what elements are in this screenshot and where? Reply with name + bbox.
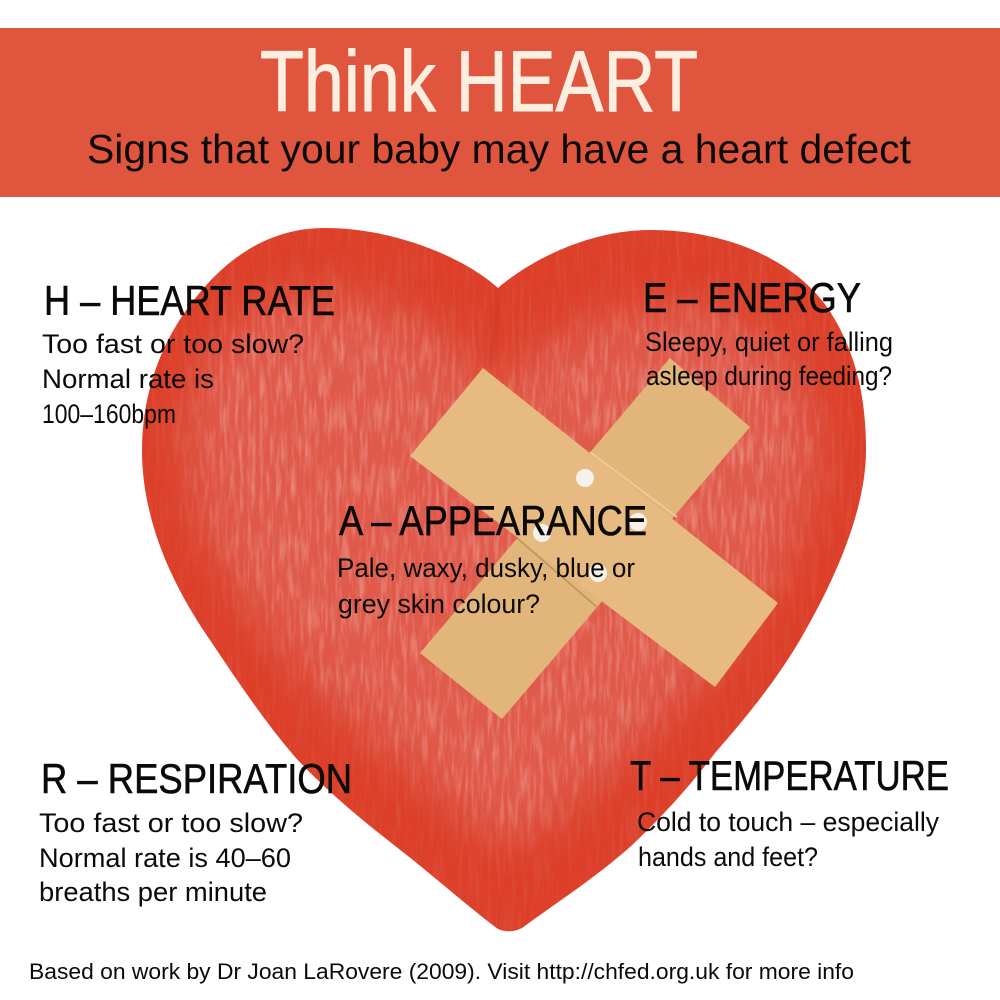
heading: H – HEART RATE: [44, 277, 335, 324]
header banner: [0, 28, 1000, 197]
section: R respiration: breaths per minute: [39, 877, 267, 907]
heart illustration: [130, 220, 880, 940]
section: H heart rate: 100–160bpm: [42, 399, 176, 429]
bandage strip: upper-left to lower-right: [410, 368, 778, 687]
subtitle: Signs that your baby may have a heart defect: [87, 126, 912, 172]
section: H heart rate: Normal rate is: [42, 364, 214, 394]
section: T temperature: [630, 752, 949, 872]
bandage holes: [576, 469, 594, 487]
bandage strip: lower-left to upper-right: [420, 358, 750, 719]
section: E energy: asleep during feeding?: [646, 361, 892, 391]
title: Think HEART: [260, 34, 698, 130]
heading: R – RESPIRATION: [41, 755, 352, 802]
section: A appearance: [337, 497, 647, 619]
description: Pale, waxy, dusky, blue or: [337, 553, 635, 583]
centre crease: [490, 296, 498, 361]
description: Cold to touch – especially: [637, 807, 939, 837]
description: Too fast or too slow?: [42, 329, 304, 359]
heading: E – ENERGY: [643, 274, 861, 321]
section: R respiration: Normal rate is 40–60: [39, 843, 291, 873]
section: R respiration: [39, 755, 352, 907]
description: Sleepy, quiet or falling: [645, 327, 893, 357]
section: H heart rate: [42, 277, 335, 429]
heading: A – APPEARANCE: [339, 497, 647, 544]
section: T temperature: hands and feet?: [638, 842, 818, 872]
section: E energy: [643, 274, 893, 391]
description: Too fast or too slow?: [39, 808, 303, 838]
section: A appearance: grey skin colour?: [338, 589, 540, 619]
footer credit: Based on work by Dr Joan LaRovere (2009). Visit http://chfed.org.uk for more info: [29, 959, 854, 984]
bandage cross: [410, 358, 778, 719]
